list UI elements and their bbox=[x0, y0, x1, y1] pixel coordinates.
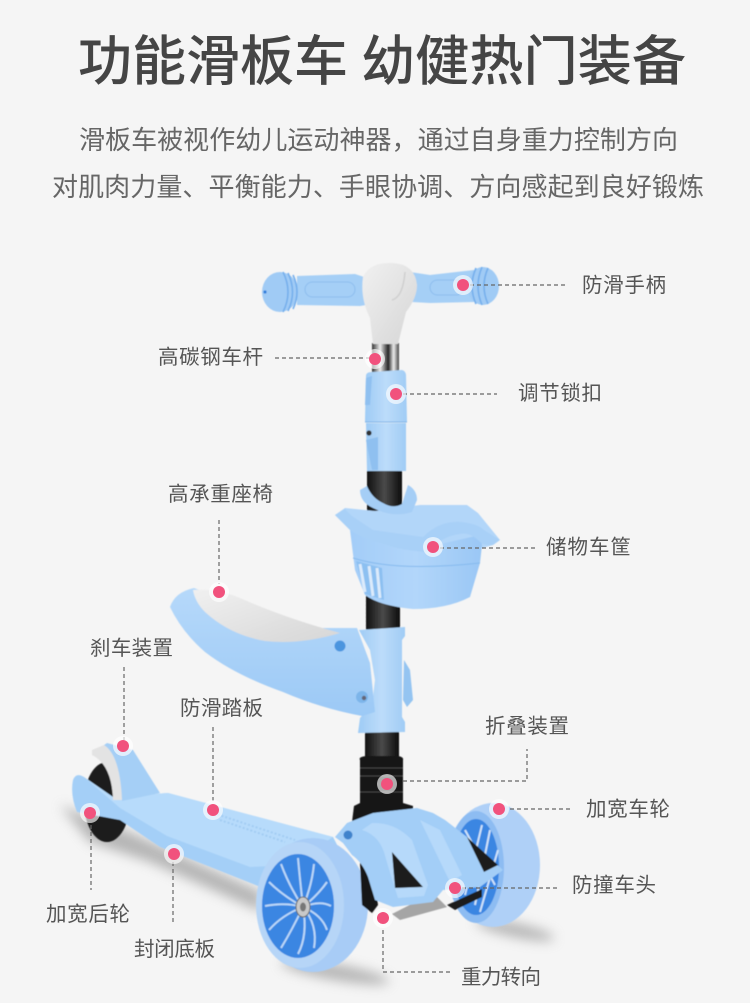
labels: 重力转向 bbox=[461, 960, 541, 990]
right front wheel bbox=[446, 803, 540, 927]
deck bbox=[72, 775, 345, 888]
axle bbox=[392, 889, 482, 920]
labels: 调节锁扣 bbox=[518, 376, 602, 406]
labels: 加宽后轮 bbox=[46, 897, 130, 927]
callout lines bbox=[91, 285, 573, 972]
rear brake bbox=[92, 743, 160, 801]
subtitle text: 对肌肉力量、平衡能力、手眼协调、方向感起到良好锻炼 bbox=[52, 167, 704, 204]
right grip bbox=[410, 270, 474, 303]
seat pad bbox=[193, 590, 340, 642]
height lock bbox=[365, 370, 407, 471]
labels: 储物车筐 bbox=[546, 530, 631, 560]
seat shell bbox=[170, 588, 375, 716]
labels: 防滑手柄 bbox=[582, 268, 666, 298]
folding sleeve bbox=[358, 627, 413, 733]
basket bbox=[335, 485, 500, 609]
labels: 防撞车头 bbox=[572, 868, 656, 898]
subtitle text bbox=[52, 120, 704, 204]
labels: 防滑踏板 bbox=[180, 691, 263, 721]
labels: 高碳钢车杆 bbox=[158, 340, 263, 370]
labels: 加宽车轮 bbox=[586, 792, 670, 822]
callout dots bbox=[80, 275, 509, 928]
labels bbox=[46, 268, 670, 990]
title: 幼健热门装备 bbox=[361, 17, 686, 96]
subtitle text: 滑板车被视作幼儿运动神器，通过自身重力控制方向 bbox=[79, 120, 678, 157]
basket holder bbox=[360, 485, 417, 514]
bottom strip bbox=[0, 1003, 750, 1006]
labels: 封闭底板 bbox=[134, 932, 215, 962]
title: 功能滑板车 bbox=[78, 17, 348, 96]
pole: chrome tube bbox=[372, 343, 399, 375]
left front wheel bbox=[256, 838, 368, 972]
ground shadows bbox=[60, 805, 556, 989]
labels: 高承重座椅 bbox=[168, 477, 273, 507]
illustration: scooter bbox=[72, 263, 540, 972]
front fork bbox=[335, 808, 503, 913]
rear wheel bbox=[84, 762, 130, 842]
wheel hub bbox=[262, 854, 334, 958]
basket body bbox=[350, 530, 482, 609]
basket rim bbox=[335, 509, 500, 552]
handlebar bbox=[262, 263, 499, 344]
labels: 刹车装置 bbox=[90, 631, 173, 661]
seat bbox=[170, 588, 375, 716]
grey stem clamp bbox=[362, 263, 417, 344]
title bbox=[78, 17, 686, 96]
left grip bbox=[297, 274, 372, 306]
pole: black lower tube bbox=[352, 470, 413, 822]
labels: 折叠装置 bbox=[485, 709, 569, 739]
basket back wall bbox=[335, 505, 500, 560]
